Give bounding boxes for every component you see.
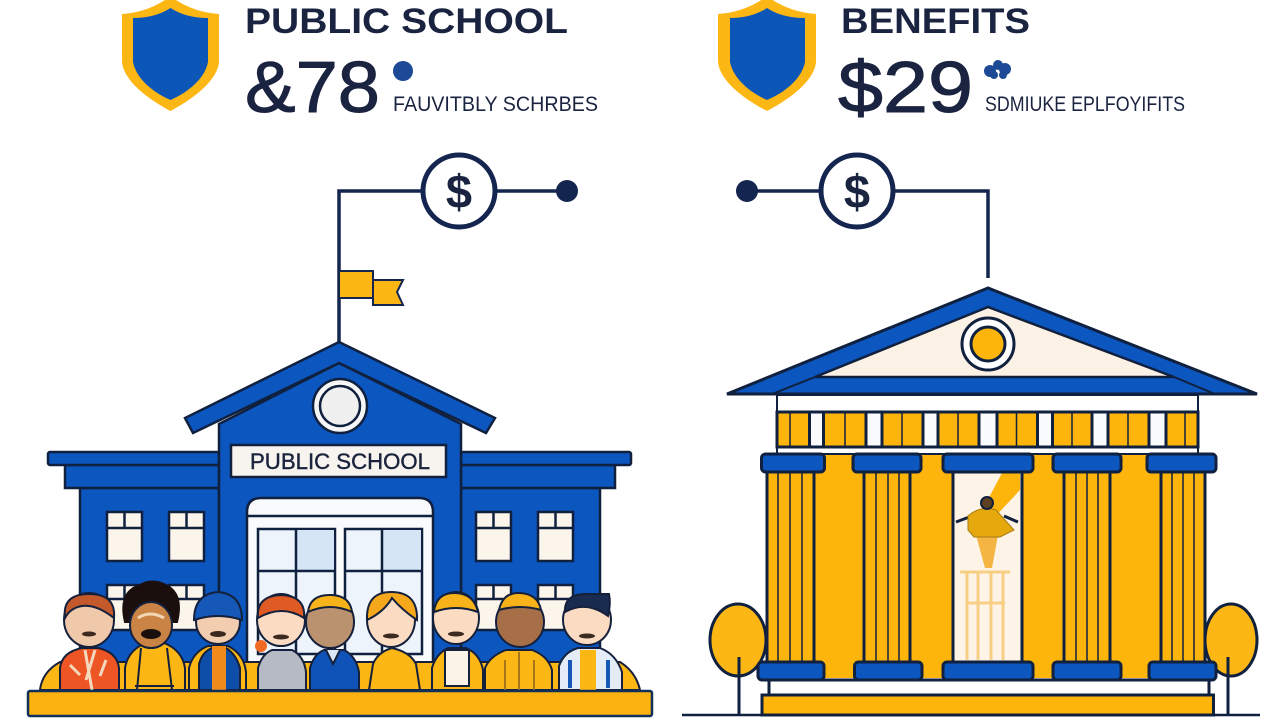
person 2 [123,582,185,690]
illustration: public school building [48,342,631,690]
base bar [28,691,652,716]
icon: blue dot [393,61,413,81]
sign [231,445,446,477]
person 9 [559,594,622,690]
capitals [762,454,1216,472]
central doorway with figure [953,472,1022,662]
person 5 [306,595,359,690]
icon: right shield [718,0,816,111]
right tree [1205,604,1257,714]
center block [219,363,461,680]
upper windows [107,512,573,561]
connector: left dollar line [339,155,578,342]
frieze [777,412,1198,447]
column bases [758,662,1216,680]
ground line [682,714,1260,716]
illustration: group of people [40,582,640,690]
left wing [48,452,219,678]
upper white band [777,395,1198,454]
panel: benefits header [718,0,1185,128]
icon: left dollar coin: $ [446,165,472,218]
icon: left shield [122,0,219,111]
person 7 [432,592,483,690]
person 8 [485,593,552,690]
pediment [727,288,1257,394]
temple wall [767,454,1205,678]
person 1 [60,593,119,690]
entrance door [247,498,433,690]
icon: right dollar coin: $ [844,165,870,218]
lower windows [107,585,573,630]
right wing [461,452,631,678]
sign: PUBLIC SCHOOL [250,449,430,474]
caption: school figure: FAUVITBLY SCHRBES [393,93,598,116]
left tree [710,604,766,714]
person 3 [189,592,246,690]
heading: benefits: BENEFITS [841,2,1030,41]
icon: school flag [339,271,403,305]
icon: left dollar coin [423,155,495,227]
figure: benefits amount: $29 [838,48,973,128]
icon: right dollar coin [821,155,893,227]
person 4 [255,594,306,690]
person 6 [367,592,420,690]
illustration: benefits temple [682,288,1260,715]
connector: right dollar line [736,155,988,278]
roof [185,342,495,433]
heading: public school: PUBLIC SCHOOL [245,2,568,41]
clock window [313,379,367,433]
panel: public school header [122,0,598,128]
icon: blue blob [984,60,1011,79]
back yellow mound [40,662,640,690]
pediment medallion [962,318,1014,370]
columns [767,472,1205,662]
figure: school amount: &78 [245,48,380,128]
caption: benefits figure: SDMIUKE EPLFOYIFITS [985,93,1185,116]
temple steps [762,680,1214,715]
